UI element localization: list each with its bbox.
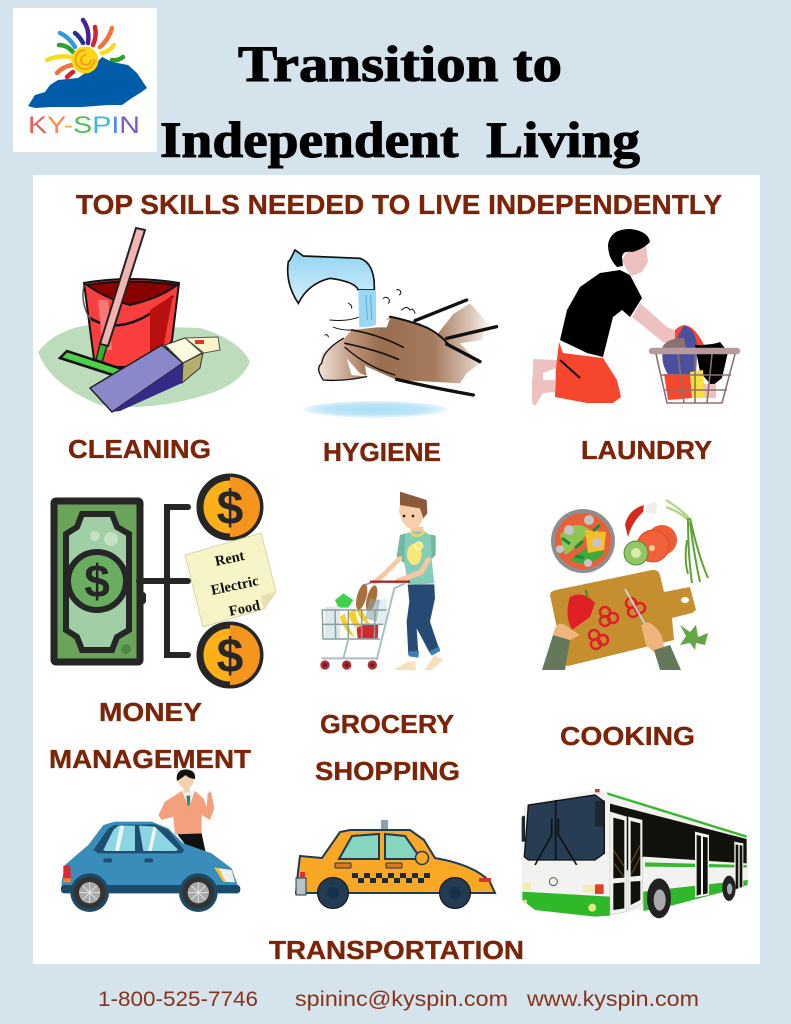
icon: red pepper and slices bbox=[567, 590, 645, 649]
footer: contact details: spininc@kyspin.com bbox=[295, 988, 508, 1011]
icon: dollar coin top: $ bbox=[217, 482, 244, 535]
icon: cooking bbox=[542, 500, 708, 670]
note: rent electric food: Electric bbox=[210, 573, 261, 599]
icon: water puddle bbox=[303, 401, 447, 418]
icon: bus bbox=[522, 789, 748, 918]
label: grocery shopping bbox=[315, 709, 460, 786]
icon: faucet bbox=[288, 250, 374, 303]
icon: grocery shopping bbox=[320, 492, 443, 670]
icon: hygiene hand washing bbox=[288, 250, 497, 418]
icon: laundry person bbox=[532, 229, 737, 406]
icon: money management bbox=[54, 477, 276, 685]
icon: shopper bbox=[374, 492, 443, 670]
icon: hands with sleeves bbox=[542, 622, 681, 670]
icon: cart bbox=[320, 582, 410, 670]
icon: cleaning bbox=[38, 228, 250, 412]
title: Transition to bbox=[238, 37, 562, 93]
footer: contact details bbox=[98, 988, 699, 1011]
icon: salad bowl bbox=[551, 509, 615, 573]
icon: dollar coin top bbox=[200, 477, 260, 537]
icon: car with man bbox=[61, 769, 240, 912]
icon: dollar coin bottom bbox=[200, 625, 260, 685]
icon: chili and vegetables bbox=[624, 500, 708, 583]
logo: KY-SPIN: KY-SPIN bbox=[28, 112, 140, 139]
logo: KY-SPIN bbox=[13, 8, 157, 152]
label: grocery shopping: GROCERY bbox=[320, 709, 454, 739]
label: cooking: COOKING bbox=[560, 721, 695, 751]
note: rent electric food: Rent bbox=[214, 548, 246, 570]
title bbox=[160, 37, 640, 169]
icon: parsley bbox=[680, 625, 708, 650]
footer: contact details: www.kyspin.com bbox=[526, 988, 699, 1011]
icon: man thumbs up bbox=[158, 769, 214, 852]
note: rent electric food bbox=[185, 533, 276, 627]
label: cleaning: CLEANING bbox=[68, 434, 211, 464]
icon: taxi bbox=[296, 820, 495, 908]
label: hygiene: HYGIENE bbox=[323, 437, 441, 467]
icon: laundry basket bbox=[652, 325, 737, 403]
label: transportation: TRANSPORTATION bbox=[269, 935, 524, 965]
footer: contact details: 1-800-525-7746 bbox=[98, 988, 258, 1011]
note: rent electric food: Food bbox=[228, 598, 262, 620]
label: money management: MONEY bbox=[99, 697, 202, 727]
icon: dollar coin bottom: $ bbox=[217, 630, 244, 683]
icon: Kentucky state shape bbox=[28, 57, 147, 108]
heading: top skills: TOP SKILLS NEEDED TO LIVE INDEPENDENTLY bbox=[76, 189, 722, 220]
icon: money management: $ bbox=[84, 555, 110, 607]
label: laundry: LAUNDRY bbox=[581, 435, 712, 465]
bus doors bbox=[610, 812, 743, 915]
label: money management bbox=[49, 697, 251, 774]
title: Independent Living bbox=[160, 113, 640, 169]
panel: main white panel bbox=[33, 175, 760, 964]
label: money management: MANAGEMENT bbox=[49, 744, 251, 774]
icon: cutting board bbox=[550, 570, 696, 666]
label: grocery shopping: SHOPPING bbox=[315, 756, 460, 786]
